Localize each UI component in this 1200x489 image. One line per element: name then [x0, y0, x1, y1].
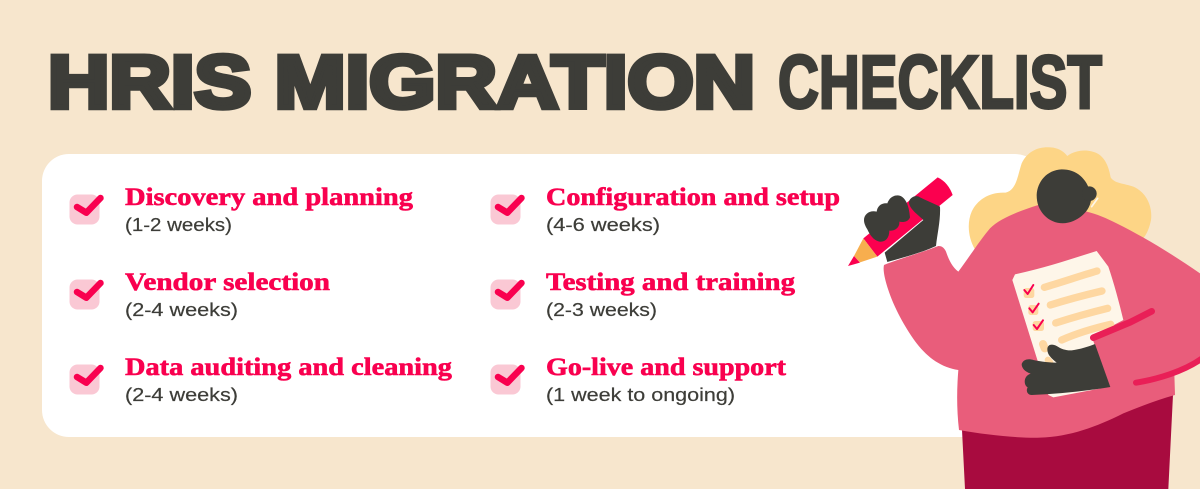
item: configuration and setup: Configuration and setup	[546, 184, 840, 211]
upper hand	[864, 195, 940, 262]
item: testing and training	[490, 269, 796, 320]
earring	[1092, 198, 1098, 207]
item: vendor selection: (2-4 weeks)	[125, 300, 238, 320]
item: vendor selection	[70, 269, 330, 320]
item: discovery and planning	[70, 184, 414, 235]
panel: checklist	[42, 154, 1042, 437]
item: configuration and setup	[490, 184, 840, 235]
checklist paper	[1012, 251, 1123, 397]
pants	[962, 395, 1173, 489]
item: go-live and support: (1 week to ongoing)	[546, 385, 735, 405]
item: discovery and planning: (1-2 weeks)	[125, 215, 232, 235]
item: data auditing and cleaning	[70, 354, 453, 405]
item: go-live and support: Go-live and support	[546, 354, 787, 381]
title: HRIS MIGRATION	[48, 40, 755, 124]
head	[1037, 169, 1097, 223]
sweater	[884, 205, 1200, 438]
illustration: woman holding checklist and pencil	[848, 147, 1200, 489]
item: data auditing and cleaning: (2-4 weeks)	[125, 385, 238, 405]
pencil	[848, 177, 953, 266]
item: testing and training: Testing and training	[546, 269, 796, 296]
item: configuration and setup: (4-6 weeks)	[546, 215, 660, 235]
item: go-live and support	[490, 354, 787, 405]
sleeve line: lower	[1136, 359, 1200, 383]
hair	[969, 147, 1151, 273]
title: CHECKLIST	[778, 40, 1102, 124]
item: vendor selection: Vendor selection	[125, 269, 330, 296]
item: data auditing and cleaning: Data auditing and cleaning	[125, 354, 453, 381]
title	[48, 40, 1102, 124]
item: testing and training: (2-3 weeks)	[546, 300, 657, 320]
lower hand	[1022, 344, 1110, 395]
sleeve line: upper	[1093, 311, 1152, 338]
item: discovery and planning: Discovery and planning	[125, 184, 414, 211]
